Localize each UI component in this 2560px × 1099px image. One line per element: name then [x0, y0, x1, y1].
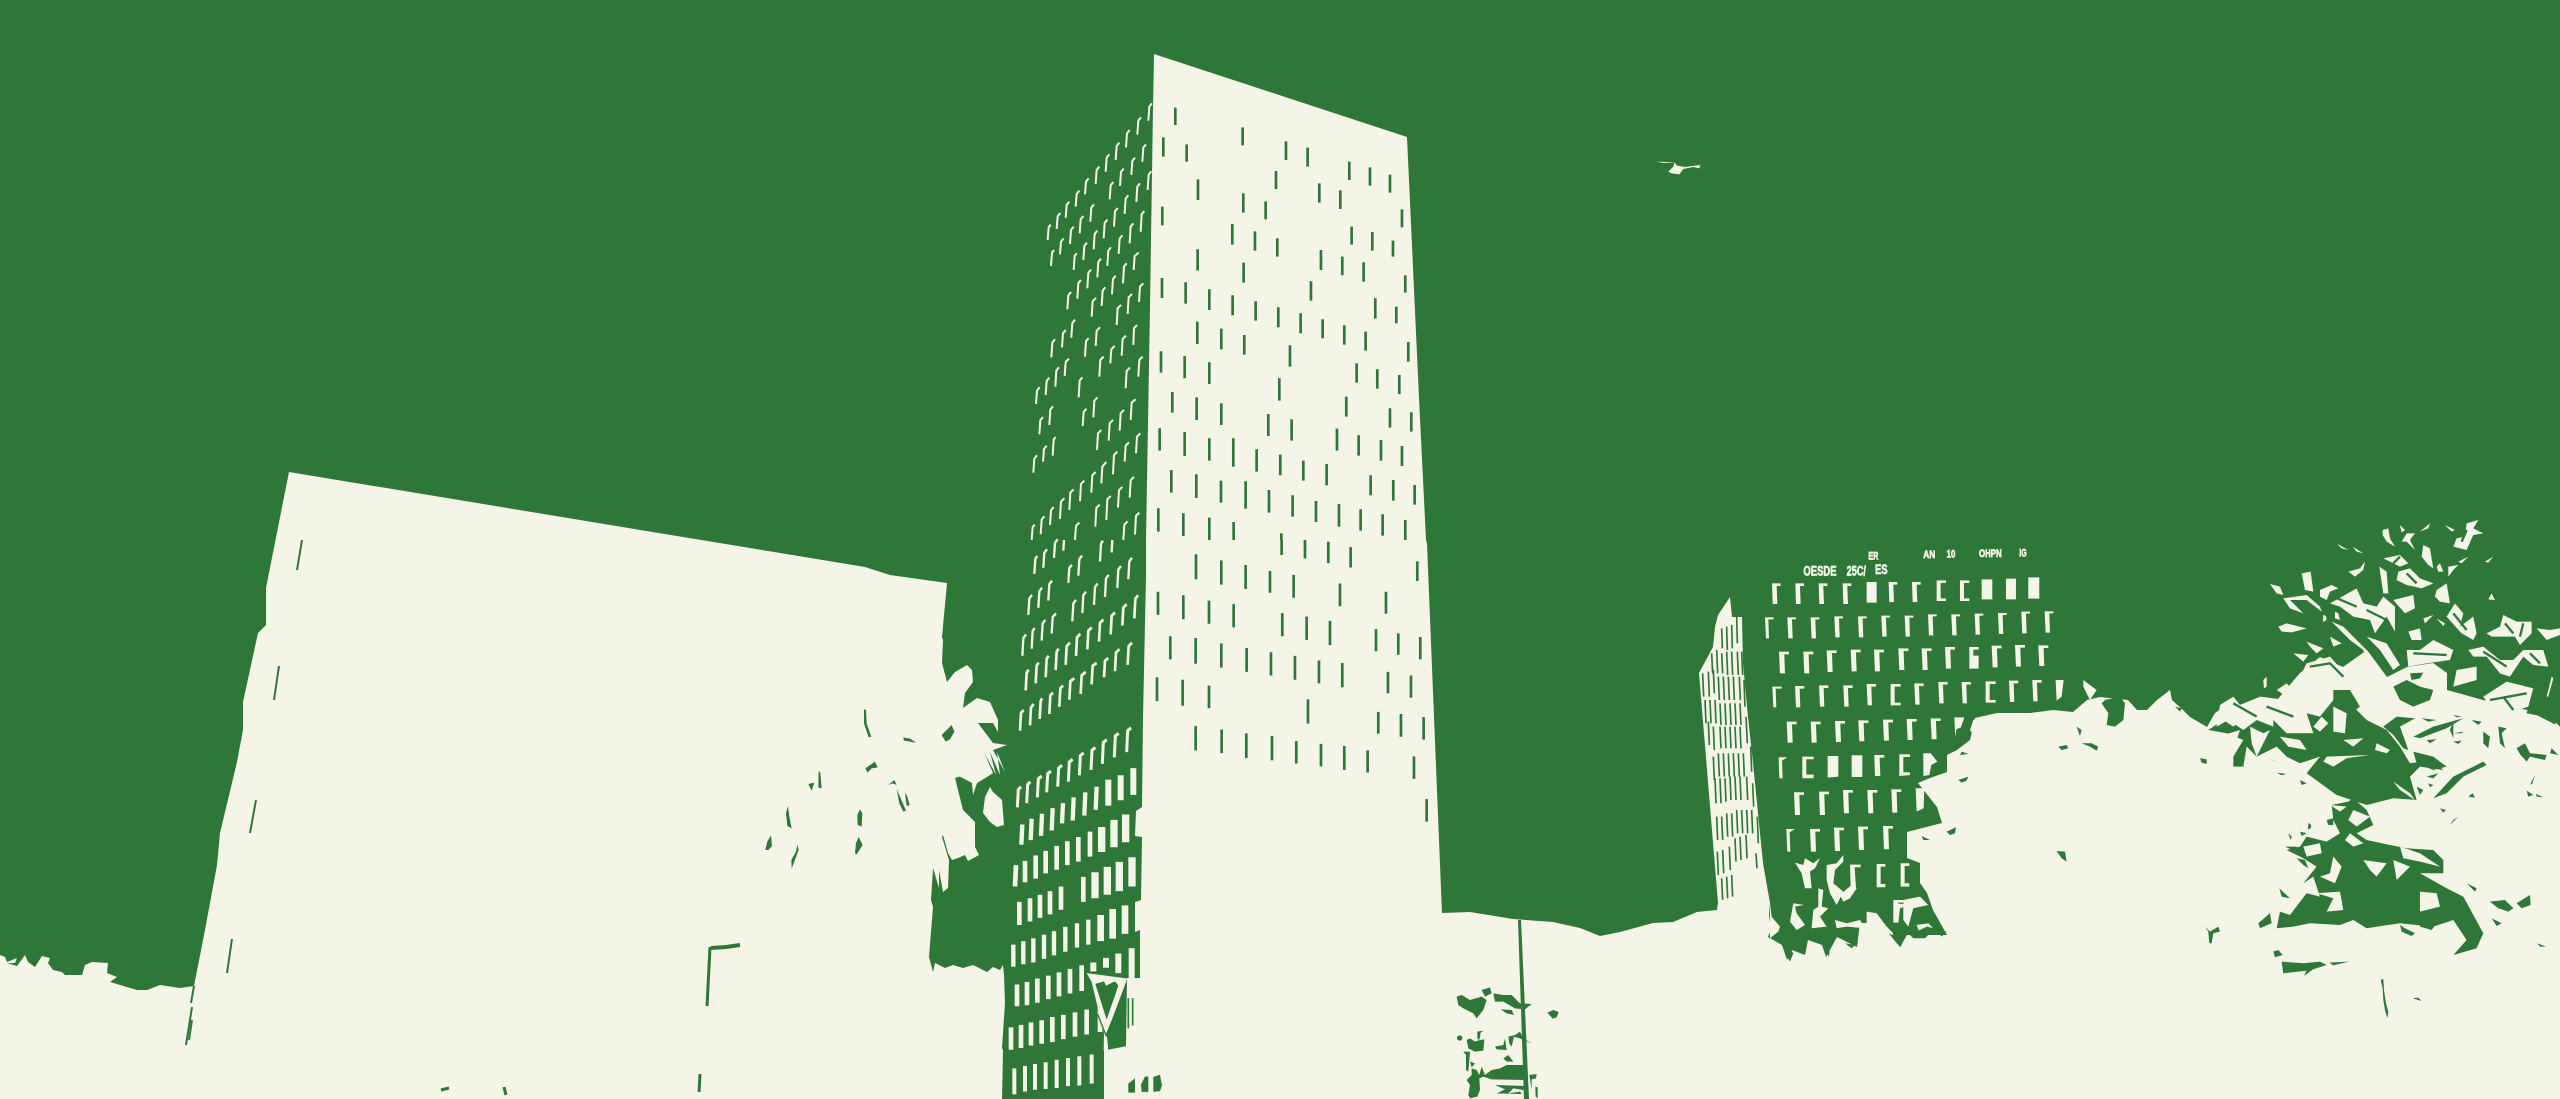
- green specks on canopy near office block: [1786, 727, 2098, 962]
- ground and tree canopy on the right: [1300, 597, 2560, 1099]
- central tower: [1104, 54, 1442, 1099]
- central tower left face windows, lower: [1011, 539, 1138, 1094]
- building signage letters: [1803, 548, 2027, 578]
- building signage letters: AN: [1923, 549, 1935, 561]
- palm frond gaps on the left building: [765, 709, 954, 869]
- shrub foliage: [1457, 987, 1559, 1098]
- central tower left face windows, upper: [1032, 103, 1152, 540]
- building signage letters: ER: [1868, 550, 1879, 562]
- helicopter: [1657, 162, 1701, 174]
- foreground shrub flecks over office block: [1770, 680, 2097, 938]
- large tree: pale leaf flecks: [2217, 520, 2560, 912]
- left low building and foreground ground with palm: [0, 472, 1007, 1099]
- left building wall marks: [186, 540, 740, 1095]
- building signage letters: ES: [1875, 561, 1888, 577]
- distant small tower windows: [1703, 617, 1758, 900]
- small doors at tower base: [1128, 1075, 1162, 1093]
- office block windows: [1765, 577, 2064, 923]
- building signage letters: IG: [2019, 548, 2027, 560]
- street lamp: [1087, 973, 1133, 1051]
- palm lobe: [983, 787, 1004, 827]
- building signage letters: 10: [1947, 549, 1955, 561]
- building signage letters: 25C/: [1847, 562, 1866, 578]
- street pole and shrub: [1457, 920, 1559, 1099]
- building signage letters: OHPN: [1979, 548, 2002, 560]
- large tree: dark foliage masses: [2208, 633, 2560, 955]
- large tree: green branches and specks on pale ground: [2102, 697, 2558, 1018]
- building signage letters: OESDE: [1803, 562, 1837, 578]
- central tower right face windows, upper: [1158, 108, 1415, 540]
- large tree: fine green twigs breaking up the leaf masses: [2233, 530, 2540, 717]
- central tower right face windows, lower: [1157, 540, 1427, 822]
